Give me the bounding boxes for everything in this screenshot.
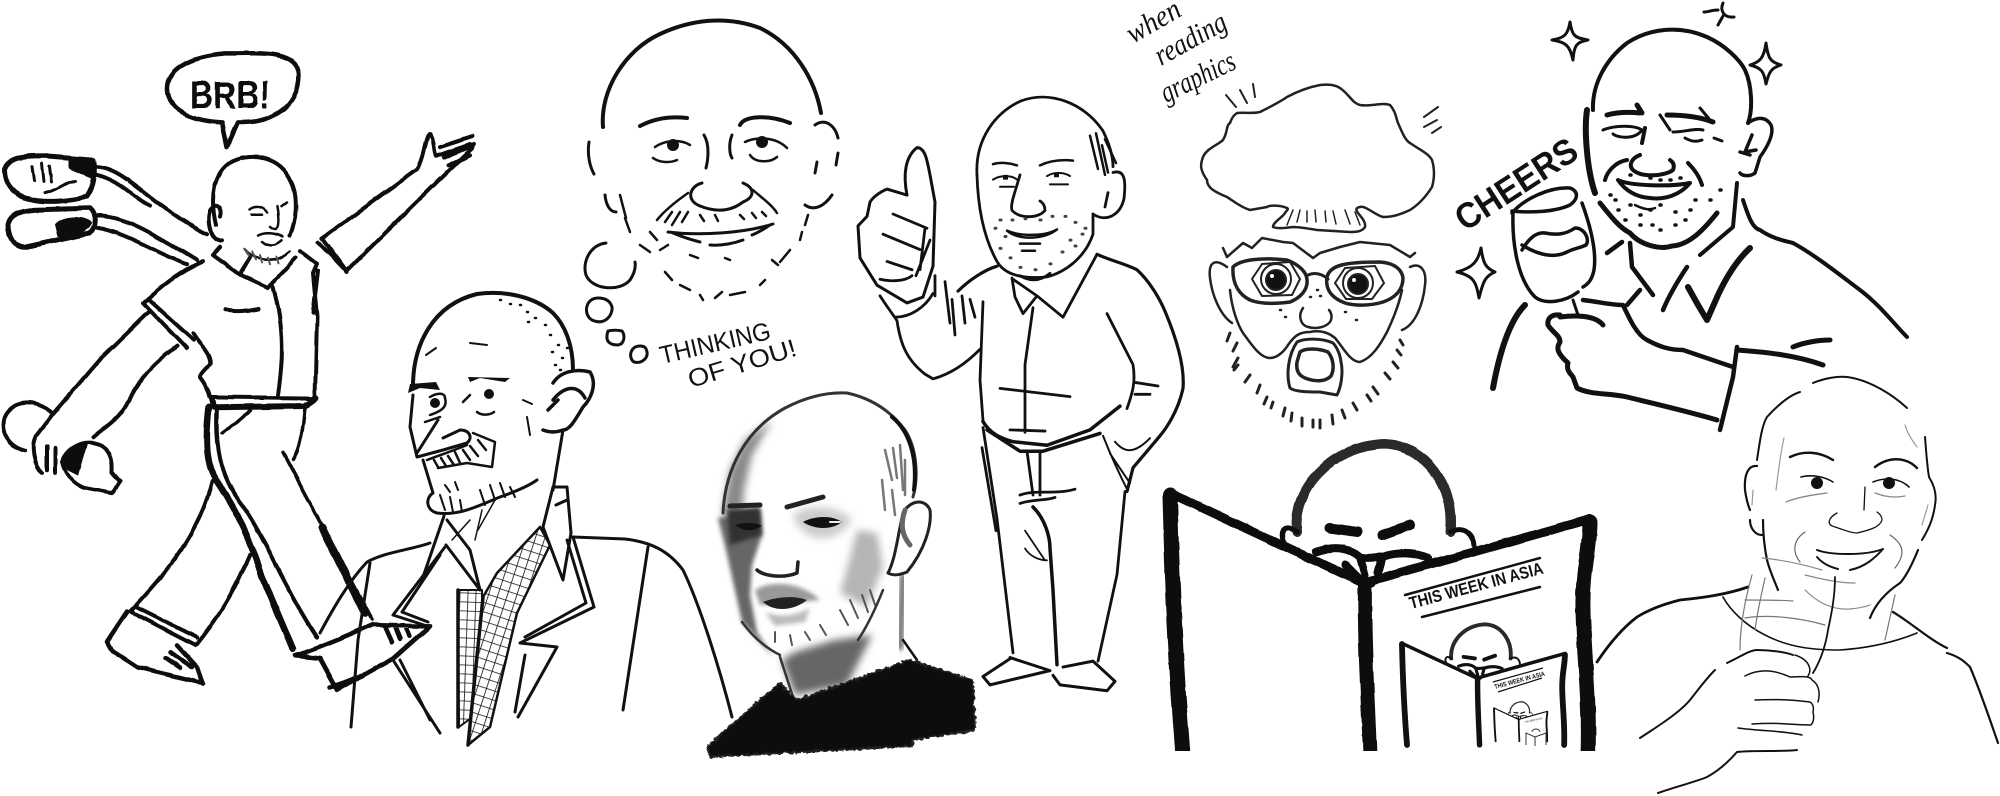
trouser inner stripe: [217, 407, 317, 638]
cloud stem lines: [1287, 210, 1360, 225]
sparkle 1: [1552, 22, 1588, 60]
shoulders: [958, 254, 1183, 492]
stubble side: [882, 445, 905, 515]
thumb: [905, 148, 935, 202]
nose: [1829, 487, 1882, 533]
left eye: [1252, 262, 1300, 296]
mouth outer: [1288, 339, 1342, 395]
ear right: [1740, 118, 1772, 176]
left lapel: [393, 547, 445, 733]
stem: [1573, 300, 1578, 315]
lower shoe: [8, 208, 95, 247]
trouser centre: [1033, 507, 1057, 665]
freckles: [1280, 290, 1357, 320]
mouth: [668, 224, 773, 245]
eyes: [1603, 108, 1722, 141]
upper shoe: [5, 156, 94, 201]
collar: [1723, 597, 1917, 650]
cheek creases: [1786, 493, 1905, 502]
head outline: [1757, 377, 1936, 540]
belt: [212, 398, 316, 407]
placket line: [458, 590, 483, 745]
figure: cheers man: [1447, 3, 1907, 430]
right cheek: [805, 195, 832, 208]
plaid shirt left: [458, 590, 482, 727]
ear left: [1586, 110, 1595, 193]
sparkle 4: [1457, 248, 1495, 298]
stubble dots: [1610, 175, 1721, 230]
wine: [1522, 228, 1587, 255]
forehead lines: [426, 343, 532, 435]
hand: [1583, 300, 1733, 367]
head outline: [723, 393, 916, 513]
jaw: [423, 430, 563, 514]
eyes: [1801, 476, 1909, 487]
figure: BRB walking man: [3, 53, 474, 690]
eyes: [653, 138, 787, 162]
left lens: [1233, 259, 1307, 303]
neck edge: [903, 640, 917, 660]
nose: [1631, 128, 1674, 175]
nose: [1300, 308, 1332, 328]
smile lines: [1605, 160, 1702, 185]
side hair: [1090, 133, 1116, 175]
face: [244, 203, 290, 260]
of you text: OF YOU!: [685, 334, 800, 394]
upper left head shadow: [722, 420, 772, 520]
inner arm: [1107, 314, 1158, 409]
lower lip: [1635, 205, 1655, 209]
beard dashes: [1227, 333, 1403, 428]
sparkle 3: [1704, 3, 1734, 25]
chin hatching: [440, 482, 515, 512]
head: [1593, 30, 1751, 123]
figure: pencil sketch portrait: [707, 393, 975, 757]
figure: mind blown face: [1120, 0, 1441, 428]
left eye socket: [727, 507, 762, 545]
thinking text: THINKING: [657, 317, 773, 370]
nose: [1012, 175, 1045, 217]
face: [1230, 290, 1402, 362]
eye white: [830, 521, 840, 523]
stubble: [244, 249, 278, 264]
headline: THIS WEEK IN ASIA: [1407, 559, 1545, 613]
mouth inner: [1297, 349, 1333, 381]
pupils: [430, 389, 494, 408]
trouser stripes: [207, 407, 293, 649]
right lens: [1327, 262, 1403, 305]
cheek shade: [840, 530, 883, 607]
jacket shoulders: [320, 537, 732, 727]
head outline: [603, 20, 821, 127]
speech bubble: [167, 53, 299, 147]
jaw: [977, 175, 1093, 278]
bottle dark band: [62, 442, 88, 475]
fist and cord: [3, 403, 55, 472]
left shoulder: [1493, 305, 1525, 388]
plaid shirt right: [468, 527, 550, 745]
sleeve: [880, 276, 980, 379]
fingers: [880, 214, 930, 281]
fingers: [1738, 655, 1819, 735]
headline rules: [1405, 558, 1540, 617]
figure: jacket man: [320, 293, 732, 745]
sparkle 2: [1750, 43, 1781, 84]
right shoulder: [1893, 612, 1998, 743]
figure: newspaper reader: [1170, 444, 1590, 755]
scalp stipple: [500, 300, 568, 370]
eyes: [993, 173, 1070, 187]
wine glass bowl: [1513, 203, 1595, 302]
shoulder: [1743, 200, 1907, 337]
moustache: [657, 190, 777, 225]
hand left: [1548, 315, 1717, 420]
shoulders: [1597, 587, 1748, 662]
trouser thigh: [222, 407, 372, 619]
finger: [1560, 316, 1603, 325]
neck back: [900, 577, 903, 647]
jaw: [1600, 203, 1717, 247]
medium headline rules: [1493, 668, 1543, 692]
nose: [757, 562, 798, 576]
left arm: [36, 312, 177, 437]
trouser zip: [1020, 451, 1075, 503]
collar: [1012, 254, 1097, 317]
cheers text: CHEERS: [1447, 129, 1585, 239]
right shoe: [1053, 661, 1115, 691]
ear: [1093, 172, 1125, 218]
brows: [640, 117, 790, 126]
speech bubble text: BRB!: [190, 73, 270, 117]
lower lip shade: [765, 608, 810, 626]
neck shade: [782, 635, 872, 695]
collar lower: [1607, 242, 1687, 310]
wine glass rim: [1512, 188, 1576, 213]
right eye: [1335, 266, 1384, 299]
pupils: [1003, 173, 1059, 180]
placket: [1000, 308, 1070, 432]
torso left: [980, 302, 983, 420]
ear: [888, 502, 930, 575]
figure: thin line man with glass: [1597, 377, 1998, 793]
thought bubbles: [585, 243, 647, 362]
beard hatch: [775, 590, 875, 645]
ears: [588, 122, 838, 212]
bridge: [1308, 274, 1328, 279]
brows: [730, 497, 823, 507]
ear: [543, 370, 593, 432]
impact marks: [1226, 84, 1441, 133]
reader medium: [1402, 624, 1565, 745]
eyes outline: [425, 394, 494, 422]
fist: [858, 189, 935, 303]
eyes: [735, 517, 842, 530]
lower shoe toe: [55, 217, 92, 237]
mouth: [763, 597, 807, 609]
moustache shade: [755, 584, 820, 605]
black sweater: [707, 660, 975, 757]
hand: [1640, 650, 1797, 793]
head top: [977, 97, 1113, 175]
jaw: [1763, 520, 1918, 618]
left shoe: [983, 658, 1050, 685]
explosion cloud: [1201, 85, 1434, 232]
upper shoe detail: [32, 159, 93, 193]
medium headline: THIS WEEK IN ASIA: [1494, 671, 1546, 691]
crease: [1025, 531, 1047, 560]
laugh lines: [1795, 532, 1902, 568]
back leg: [130, 481, 250, 645]
left face shadow: [718, 510, 773, 657]
right scalp dark: [892, 417, 915, 490]
ear inner: [902, 510, 910, 545]
head: [209, 157, 296, 241]
small headline: THIS WEEK IN ASIA: [1524, 716, 1543, 724]
collar: [1688, 248, 1750, 320]
shirt: [143, 238, 347, 398]
reader large: [1170, 444, 1590, 755]
trouser right: [1098, 492, 1125, 661]
nose: [691, 135, 752, 210]
trouser left: [982, 427, 1013, 653]
bottle: [62, 443, 120, 493]
note line 3: graphics: [1155, 45, 1241, 109]
brows: [1607, 105, 1713, 122]
straw: [1813, 577, 1835, 673]
small figure: [1494, 702, 1547, 741]
right eye socket: [793, 507, 852, 538]
back shoe: [107, 612, 203, 683]
figure: thinking of you face: [585, 20, 838, 394]
head: [413, 293, 573, 383]
ears: [1210, 262, 1425, 330]
glass: [1740, 575, 1895, 650]
right arm and hand: [322, 134, 474, 271]
front shoe: [295, 625, 430, 690]
brows: [993, 160, 1073, 165]
sleeve: [1720, 347, 1737, 430]
sparkles: [1457, 3, 1781, 298]
beard stipple: [620, 195, 808, 300]
figure: thumbs up man: [858, 97, 1183, 691]
brows: [408, 377, 510, 393]
raised legs: [95, 167, 207, 264]
collar: [423, 487, 571, 590]
brows: [1790, 453, 1917, 468]
stubble: [995, 216, 1086, 270]
mouth: [1007, 229, 1057, 251]
tiny figure: [1526, 729, 1546, 746]
ears: [1745, 466, 1762, 535]
sleeve folds: [1737, 340, 1830, 365]
mouth: [1618, 180, 1690, 198]
nose and face: [410, 395, 470, 457]
thick trouser edge: [322, 527, 365, 613]
when reading graphics note: [1120, 0, 1241, 109]
hair: [1223, 238, 1415, 258]
pupils: [1811, 477, 1895, 489]
temple lines: [1752, 425, 1928, 525]
pocket: [1103, 436, 1150, 489]
waist and belt: [983, 406, 1120, 451]
note line 2: reading: [1148, 5, 1233, 72]
jaw line: [742, 590, 883, 697]
moustache: [427, 433, 495, 468]
neck: [1700, 183, 1737, 255]
pupils: [667, 136, 768, 151]
right lapel: [515, 537, 594, 717]
glass rim: [1762, 558, 1870, 609]
mouth: [1817, 549, 1883, 570]
reader small: [1494, 702, 1547, 746]
neck hatching: [452, 500, 495, 540]
